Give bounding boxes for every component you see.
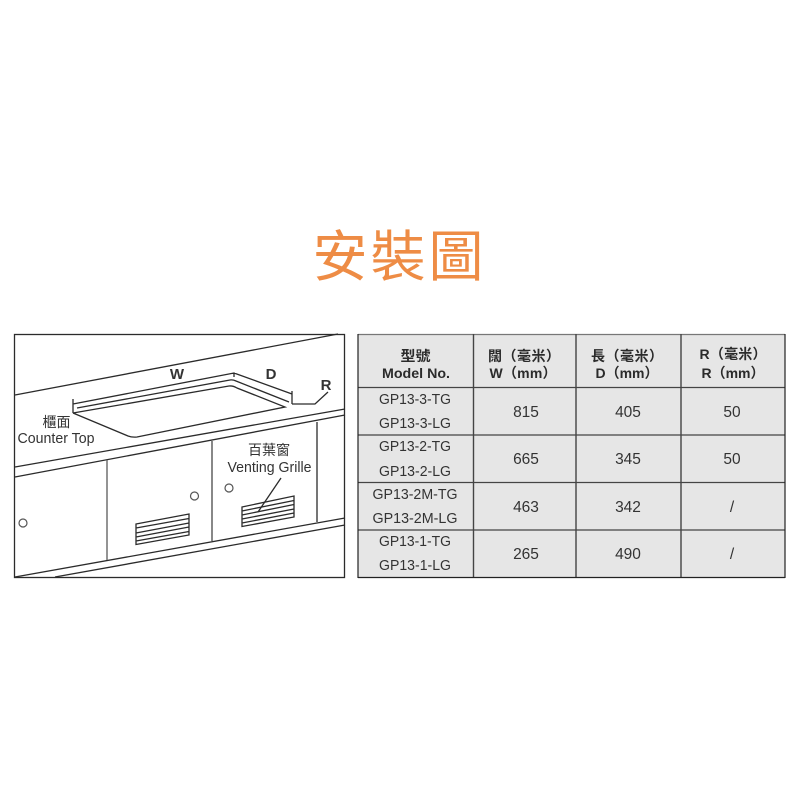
- row: GP13-3: 50: [723, 404, 741, 421]
- label: counter top: Counter Top: [18, 431, 94, 447]
- row: GP13-2: [379, 439, 741, 480]
- table grid: [358, 334, 785, 578]
- label: W: W: [170, 366, 185, 383]
- header: model: [382, 348, 450, 381]
- row: GP13-3: [379, 392, 741, 432]
- header: width: W（mm）: [490, 365, 556, 381]
- row: GP13-3: GP13-3-LG: [379, 416, 451, 432]
- counter top cutout: [73, 373, 292, 437]
- row: GP13-1: GP13-1-LG: [379, 558, 451, 574]
- counter top back edge: [15, 334, 338, 395]
- counter front edges: [15, 409, 345, 477]
- header: depth: 長（毫米）: [591, 348, 663, 364]
- label: D: D: [266, 366, 277, 383]
- row: GP13-2M: GP13-2M-LG: [372, 511, 458, 527]
- row: GP13-1: 265: [513, 546, 539, 563]
- header: model: Model No.: [382, 365, 450, 381]
- label: venting grille: Venting Grille: [228, 460, 312, 476]
- icon: venting grille left: [136, 514, 189, 544]
- row: GP13-2: GP13-2-TG: [379, 439, 451, 455]
- header: radius: R（毫米）: [700, 346, 766, 362]
- row: GP13-2M: GP13-2M-TG: [372, 487, 458, 503]
- header: width: [488, 348, 560, 381]
- leader: venting grille: [258, 478, 281, 512]
- row: GP13-2M: 342: [615, 499, 641, 516]
- label: R: R: [321, 377, 332, 394]
- icon: door knob left: [19, 519, 27, 527]
- row: GP13-1: [379, 534, 735, 574]
- panel: installation diagram: [14, 334, 345, 578]
- label: venting grille: 百葉窗: [248, 442, 290, 458]
- label: venting grille: [228, 442, 312, 476]
- header: radius: R（mm）: [702, 365, 764, 381]
- row: GP13-1: 490: [615, 546, 641, 563]
- row: GP13-2: 50: [723, 451, 741, 468]
- icon: venting grille right: [242, 496, 294, 526]
- icon: door knob middle: [190, 492, 198, 500]
- header: model: 型號: [400, 348, 430, 364]
- label: counter top: 櫃面: [42, 414, 70, 430]
- row: GP13-2M: /: [730, 499, 735, 516]
- row: GP13-2: GP13-2-LG: [379, 464, 451, 480]
- header: radius: [700, 346, 766, 381]
- row: GP13-3: 405: [615, 404, 641, 421]
- cabinet door dividers: [107, 422, 317, 560]
- row: GP13-1: GP13-1-TG: [379, 534, 451, 550]
- header: width: 闊（毫米）: [488, 348, 560, 364]
- row: GP13-3: GP13-3-TG: [379, 392, 451, 408]
- cabinet base edges: [15, 518, 345, 577]
- header: depth: D（mm）: [596, 365, 658, 381]
- leader: R: [292, 392, 328, 404]
- row: GP13-2M: 463: [513, 499, 539, 516]
- header: depth: [591, 348, 663, 381]
- row: GP13-3: 815: [513, 404, 539, 421]
- row: GP13-2: 345: [615, 451, 641, 468]
- panel: dimensions table: [358, 334, 785, 578]
- row: GP13-1: /: [730, 546, 735, 563]
- row: GP13-2M: [372, 487, 735, 527]
- title: 安裝圖: [312, 212, 484, 292]
- row: GP13-2: 665: [513, 451, 539, 468]
- label: counter top: [18, 414, 94, 447]
- icon: door knob right: [225, 484, 233, 492]
